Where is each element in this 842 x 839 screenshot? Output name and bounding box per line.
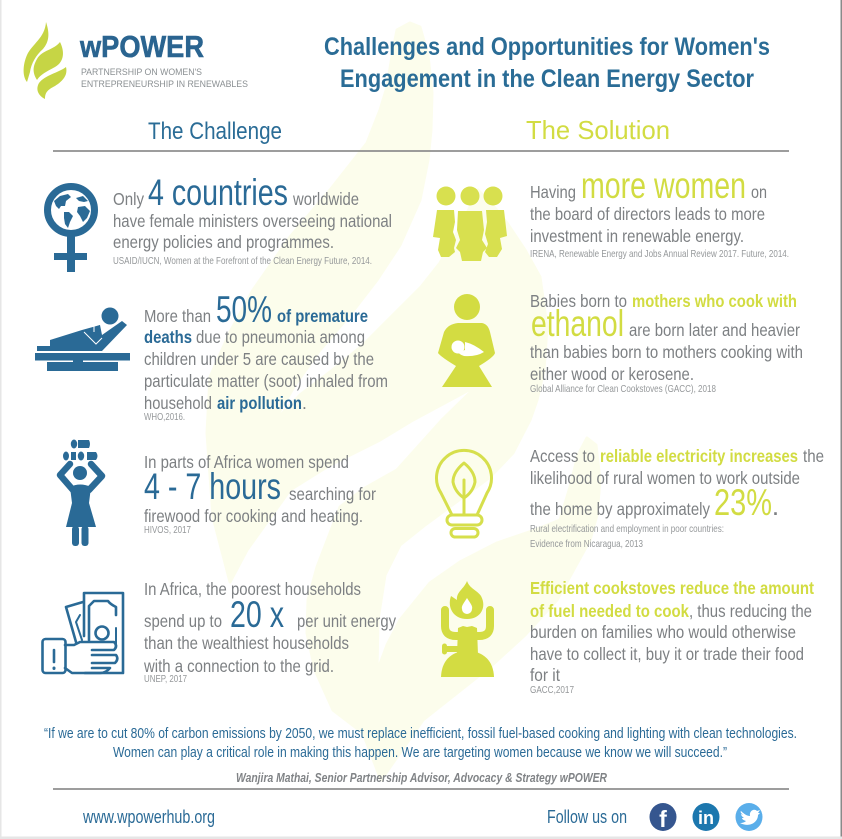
background flame watermark [207, 23, 600, 780]
icon: hand holding money [42, 593, 123, 673]
text: 4 - 7 hours: searching for [289, 484, 376, 504]
follow us label: Follow us on [547, 807, 627, 827]
icon: facebook: f [659, 806, 667, 832]
quote attribution: Wanjira Mathai, Senior Partnership Advisor, Advocacy & Strategy wPOWER [236, 770, 607, 785]
text: 50% premature deaths: deaths [144, 327, 192, 347]
icon: gas cookstove with flame [441, 581, 494, 677]
icon: twitter [736, 803, 762, 831]
logo wordmark: wPOWER [79, 29, 204, 64]
text: 50% premature deaths: due to pneumonia among [196, 327, 365, 347]
logo tagline [81, 67, 248, 90]
text: reliable electricity 23%: Evidence from Nicaragua, 2013 [530, 538, 643, 550]
logo flame icon [24, 22, 66, 99]
text: 4 - 7 hours: HIVOS, 2017 [144, 524, 191, 536]
text: 20 x: per unit energy [297, 611, 396, 631]
text: 20 x: UNEP, 2017 [144, 673, 187, 685]
text: ethanol: Global Alliance for Clean Cookstoves (GACC), 2018 [530, 383, 716, 395]
text: 50% premature deaths: household [144, 393, 212, 413]
text: efficient cookstoves: for it [530, 665, 560, 685]
icon: woman carrying firewood [60, 440, 102, 546]
text: more women: on [751, 182, 767, 202]
text: efficient cookstoves: GACC,2017 [530, 684, 574, 696]
text: efficient cookstoves: burden on families who would otherwise [530, 622, 796, 642]
text: 4 - 7 hours: In parts of Africa women spend [144, 452, 349, 472]
text: reliable electricity 23%: likelihood of rural women to work outside [530, 468, 800, 488]
title: Engagement in the Clean Energy Sector [340, 65, 754, 93]
text: efficient cookstoves: have to collect it, buy it or trade their food [530, 644, 804, 664]
text: 4 - 7 hours [144, 452, 376, 536]
icon: patient on hospital bed [35, 308, 130, 371]
icon: globe in female symbol [48, 186, 94, 272]
text: 20 x: In Africa, the poorest households [144, 579, 361, 599]
text: more women: the board of directors leads to more [530, 204, 765, 224]
website link: www.wpowerhub.org [82, 807, 215, 827]
text: 4 countries: USAID/IUCN, Women at the Forefront of the Clean Energy Future, 2014. [113, 255, 372, 267]
text: reliable electricity 23%: reliable electricity increases [600, 446, 798, 466]
icon: linkedin [692, 803, 720, 831]
text: more women: investment in renewable energy. [530, 226, 744, 246]
title: Challenges and Opportunities for Women's [324, 33, 770, 61]
text: 4 countries: Only [113, 189, 144, 209]
text: ethanol: either wood or kerosene. [530, 364, 694, 384]
text: ethanol: are born later and heavier [629, 320, 800, 340]
text: 4 countries: 4 countries [148, 172, 288, 213]
text: reliable electricity 23% [530, 446, 824, 550]
text: efficient cookstoves: , thus reducing the [689, 601, 812, 621]
text: ethanol [530, 291, 803, 395]
text: 4 countries: worldwide [292, 189, 359, 209]
text: 4 countries [113, 172, 392, 267]
icon: light bulb with leaf [436, 450, 492, 537]
text: 20 x: with a connection to the grid. [143, 656, 334, 676]
text: 50% premature deaths: children under 5 are caused by the [144, 349, 374, 369]
text: more women [530, 165, 789, 260]
text: reliable electricity 23%: 23% [714, 482, 772, 523]
text: 50% premature deaths: particulate matter (soot) inhaled from [144, 371, 388, 391]
text: 20 x [143, 579, 396, 685]
logo [24, 22, 248, 99]
text: reliable electricity 23%: the home by approximately [530, 499, 710, 519]
text: 50% premature deaths: 50% [216, 289, 272, 330]
text: reliable electricity 23%: . [773, 499, 778, 519]
text: 20 x: than the wealthiest households [144, 633, 349, 653]
heading: The Solution: The Solution [526, 115, 670, 145]
text: 50% premature deaths [144, 289, 388, 423]
text: 20 x: 20 x [230, 594, 284, 635]
text: 50% premature deaths: WHO,2016. [144, 411, 185, 423]
icon: three women [433, 186, 507, 261]
text: reliable electricity 23%: the [803, 446, 824, 466]
title [324, 33, 770, 93]
text: 50% premature deaths: of premature [277, 306, 368, 326]
text: more women: Having [530, 182, 576, 202]
text: 50% premature deaths: air pollution [217, 393, 302, 413]
text: ethanol: Babies born to [530, 291, 627, 311]
heading: The Challenge: The Challenge [148, 118, 282, 145]
quote [44, 725, 797, 761]
icon: mother holding baby [438, 294, 495, 387]
logo tagline: ENTREPRENEURSHIP IN RENEWABLES [81, 79, 248, 90]
icon: facebook [650, 803, 676, 832]
icon: linkedin: in [698, 808, 714, 828]
text: efficient cookstoves [530, 578, 814, 696]
text: 4 countries: energy policies and programmes. [113, 232, 334, 252]
text: more women: more women [581, 165, 746, 206]
text: ethanol: mothers who cook with [632, 291, 797, 311]
text: 50% premature deaths: . [302, 393, 307, 413]
text: 4 - 7 hours: 4 - 7 hours [144, 466, 281, 507]
text: 4 countries: have female ministers overseeing national [113, 211, 392, 231]
text: 20 x: spend up to [144, 611, 222, 631]
logo tagline: PARTNERSHIP ON WOMEN'S [81, 67, 202, 78]
text: reliable electricity 23%: Rural electrification and employment in poor countries: [530, 523, 724, 535]
text: ethanol: than babies born to mothers cooking with [530, 342, 803, 362]
text: 50% premature deaths: More than [144, 306, 211, 326]
text: efficient cookstoves: of fuel needed to cook [530, 601, 689, 621]
text: ethanol: ethanol [531, 303, 624, 344]
text: reliable electricity 23%: Access to [530, 446, 595, 466]
text: 4 - 7 hours: firewood for cooking and heating. [144, 506, 363, 526]
